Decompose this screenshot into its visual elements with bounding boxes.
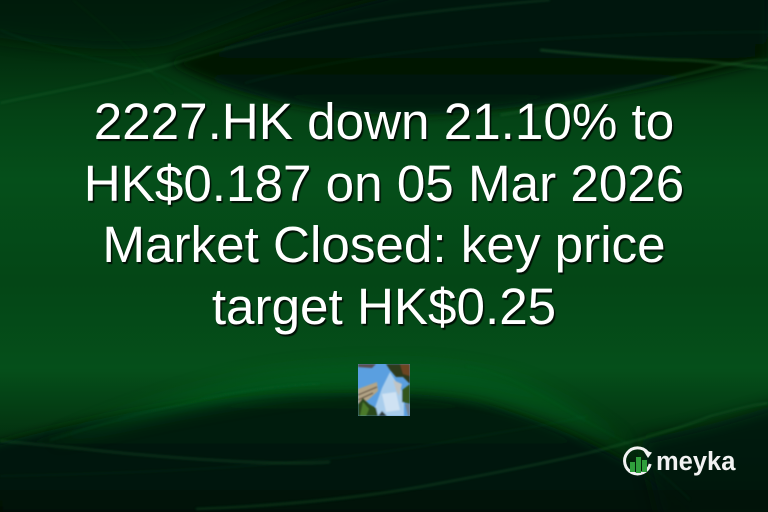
top dark lobe: [170, 0, 768, 115]
title: target HK$0.25: [212, 278, 556, 335]
title: [84, 93, 684, 337]
title: Market Closed: key price: [102, 216, 666, 273]
title: HK$0.187 on 05 Mar 2026: [84, 155, 684, 212]
wordmark: meyka: [656, 448, 736, 476]
image: skyward view of buildings: [358, 364, 410, 416]
icon: ring with bars: [625, 448, 652, 474]
bottom dark lobe: [0, 393, 700, 512]
logo: meyka: [623, 446, 736, 476]
light band above bottom lobe: [50, 363, 630, 445]
title: 2227.HK down 21.10% to: [94, 93, 674, 150]
